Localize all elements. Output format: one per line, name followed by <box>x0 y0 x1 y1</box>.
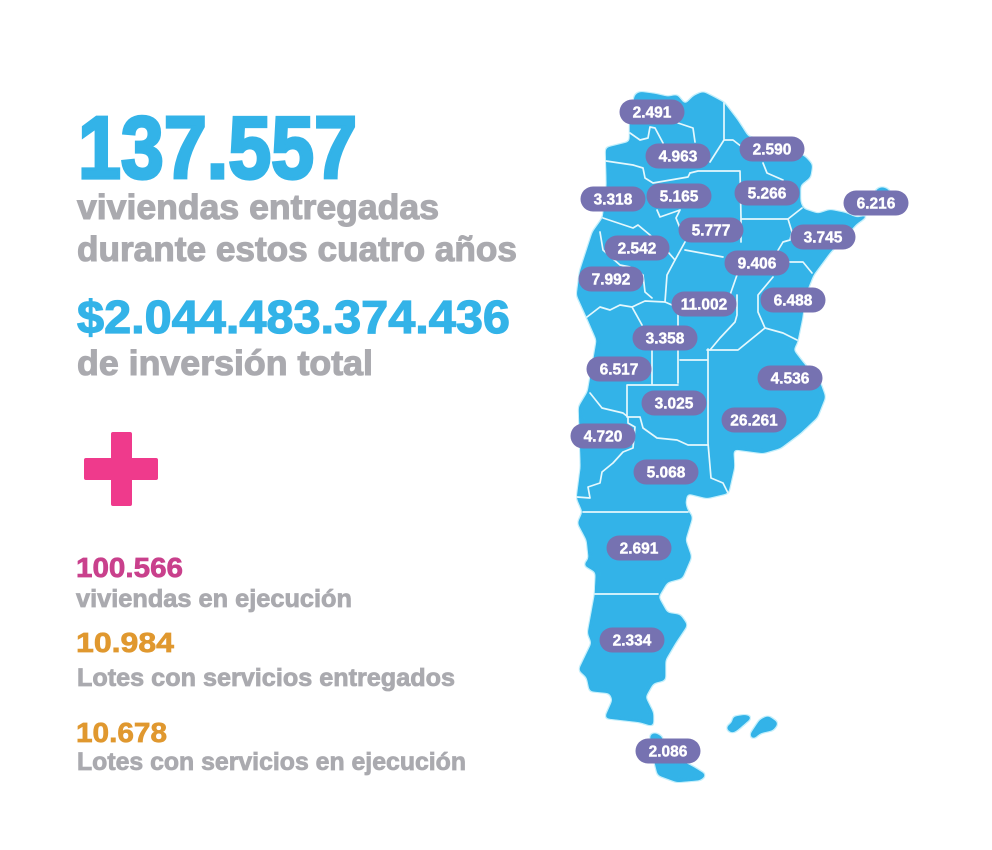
label: 5.165 <box>646 184 712 208</box>
label: 6.488 <box>760 288 826 312</box>
label: 4.720 <box>570 424 636 448</box>
label: 9.406: 9.406 <box>738 256 777 272</box>
stat: lotes entregados <box>76 627 455 692</box>
label: 26.261: 26.261 <box>730 412 778 430</box>
stat: lotes entregados: 10.984 <box>76 627 174 658</box>
label: 3.745 <box>790 224 856 250</box>
label: 4.720: 4.720 <box>584 428 622 446</box>
label: 2.086: 2.086 <box>649 744 688 760</box>
label: 5.266 <box>734 180 800 206</box>
label: 2.086 <box>636 738 700 764</box>
label: 2.542 <box>604 236 670 260</box>
map: province borders <box>577 103 812 594</box>
label: 26.261 <box>722 408 786 432</box>
headline caption: durante estos cuatro años <box>77 230 517 269</box>
stat: viviendas en ejecucion <box>76 552 352 613</box>
label: 3.318 <box>580 186 646 212</box>
label: 2.590: 2.590 <box>753 142 791 158</box>
investment amount: $2.044.483.374.436 <box>77 291 510 343</box>
stat: lotes en ejecucion: 10.678 <box>76 717 167 748</box>
label: 3.025: 3.025 <box>655 396 694 412</box>
label: 2.334 <box>600 628 664 652</box>
map: landmass <box>577 92 893 782</box>
label: 5.068 <box>634 460 698 484</box>
map of Argentina <box>570 92 908 782</box>
label: 5.068: 5.068 <box>647 464 686 482</box>
label: 6.216 <box>844 190 908 216</box>
label: 3.358: 3.358 <box>646 330 685 348</box>
label: 6.216: 6.216 <box>857 196 896 212</box>
label: 3.358 <box>632 326 698 350</box>
label: 6.517 <box>586 356 652 382</box>
label: 6.488: 6.488 <box>774 292 813 310</box>
label: 2.542: 2.542 <box>618 240 656 258</box>
label: 9.406 <box>724 250 790 276</box>
label: 2.691: 2.691 <box>620 540 659 558</box>
icon: pink plus <box>84 432 158 506</box>
stat: lotes entregados: Lotes con servicios entregados <box>77 664 455 692</box>
label: 11.002 <box>672 292 736 316</box>
label: 7.992: 7.992 <box>592 272 630 288</box>
label: 3.025 <box>642 390 706 416</box>
label: 4.963 <box>646 144 710 168</box>
label: 11.002: 11.002 <box>681 296 727 314</box>
left column: statistics <box>76 98 517 776</box>
label: 5.266: 5.266 <box>748 186 787 202</box>
label: 5.777: 5.777 <box>692 222 730 240</box>
map: Tierra del Fuego <box>650 733 706 782</box>
label: 3.318: 3.318 <box>594 192 633 208</box>
label: 2.590 <box>740 136 804 162</box>
map: province value labels <box>570 100 908 764</box>
label: 4.963: 4.963 <box>659 148 698 166</box>
label: 5.777 <box>678 218 744 242</box>
stat: lotes en ejecucion <box>76 717 466 776</box>
label: 7.992 <box>578 266 644 292</box>
investment caption: de inversión total <box>77 344 373 383</box>
label: 2.691 <box>606 536 672 560</box>
label: 4.536 <box>758 366 822 390</box>
label: 2.491: 2.491 <box>633 104 672 122</box>
headline caption <box>77 188 517 269</box>
stat: viviendas en ejecucion: viviendas en ejecución <box>76 585 352 613</box>
headline caption: viviendas entregadas <box>77 188 439 227</box>
label: 2.491 <box>620 100 684 124</box>
label: 3.745: 3.745 <box>804 230 843 246</box>
headline number: 137.557 <box>78 98 357 197</box>
map: mainland outline <box>577 92 893 726</box>
label: 6.517: 6.517 <box>600 362 638 378</box>
label: 2.334: 2.334 <box>613 632 652 650</box>
label: 5.165: 5.165 <box>660 188 699 206</box>
map: Malvinas islands <box>726 715 778 739</box>
label: 4.536: 4.536 <box>771 370 810 388</box>
stat: lotes en ejecucion: Lotes con servicios en ejecución <box>77 748 466 776</box>
stat: viviendas en ejecucion: 100.566 <box>76 552 183 583</box>
